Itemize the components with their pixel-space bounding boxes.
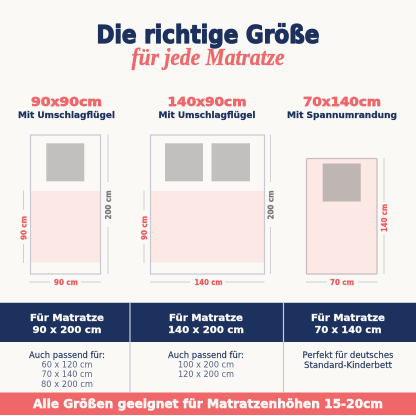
heading: 70x140cm: 70x140cm — [303, 94, 381, 109]
dimension 90 cm width — [30, 278, 101, 287]
column 2 header: 140 x 200 cm — [168, 325, 244, 336]
column 2 header: Für Matratze — [169, 313, 243, 324]
column 2 header — [168, 313, 244, 336]
title: Die richtige Größe — [96, 20, 320, 49]
dimension 90 cm height: 90 cm — [140, 216, 149, 240]
pillow right — [212, 143, 250, 181]
column 3 header: 70 x 140 cm — [314, 325, 382, 336]
column 1 body: 60 x 120 cm — [42, 360, 92, 370]
diagram: bed 90x200 — [20, 134, 113, 287]
dimension 200 cm: 200 cm — [266, 190, 276, 220]
pillow — [46, 143, 84, 181]
column 2 body: 120 x 200 cm — [178, 370, 234, 380]
column 1 header: Für Matratze — [30, 313, 104, 324]
heading: 70x140cm — [287, 94, 397, 121]
column 3 body: Perfekt für deutsches — [302, 351, 394, 361]
dimension 90 cm height — [140, 190, 149, 263]
column 2 body: 100 x 200 cm — [178, 360, 234, 370]
column 3 header: Für Matratze — [311, 313, 385, 324]
heading: 90x90cm: Mit Umschlagflügel — [18, 111, 115, 121]
heading: 140x90cm: 140x90cm — [168, 94, 246, 109]
table top rule — [0, 302, 416, 303]
dimension 90 cm height — [20, 190, 28, 263]
diagram: bed 140x200 — [140, 134, 276, 287]
dimension 70 cm: 70 cm — [330, 278, 354, 287]
footer banner — [0, 392, 416, 415]
dimension 140 cm: 140 cm — [380, 204, 389, 232]
footer banner: Alle Größen geeignet für Matratzenhöhen 15-20cm — [33, 397, 383, 411]
column 2 body — [168, 351, 244, 380]
column 1 header: 90 x 200 cm — [32, 325, 102, 336]
dimension 140 cm width — [150, 278, 264, 287]
heading: 90x90cm: 90x90cm — [31, 94, 102, 109]
table — [0, 302, 416, 392]
column 1 body: 80 x 200 cm — [41, 380, 93, 390]
pillow — [323, 164, 361, 202]
pillow left — [165, 143, 203, 181]
bed outline — [150, 135, 264, 274]
column 1 body: 70 x 140 cm — [42, 370, 92, 380]
pink flap — [30, 191, 100, 262]
column 1 body: Auch passend für: — [29, 351, 105, 361]
column 1 body — [29, 351, 105, 390]
column 2 body: Auch passend für: — [168, 351, 244, 361]
column dividers — [130, 303, 284, 392]
bed outline — [30, 135, 100, 274]
navy header band — [0, 303, 416, 342]
pink flap — [150, 191, 264, 262]
dimension 140 cm width: 140 cm — [194, 278, 222, 287]
dimension 200 cm — [266, 134, 276, 274]
title — [96, 20, 320, 71]
heading: 70x140cm: Mit Spannumrandung — [287, 111, 397, 121]
dimension 200 cm: 200 cm — [104, 190, 113, 220]
dimension 90 cm height: 90 cm — [20, 216, 28, 240]
heading: 90x90cm — [18, 94, 115, 121]
dimension 200 cm — [104, 134, 113, 274]
column 3 body — [302, 351, 394, 371]
dimension 90 cm width: 90 cm — [54, 278, 78, 287]
column 3 body: Standard-Kinderbett — [304, 361, 392, 371]
column 1 header — [30, 313, 104, 336]
heading: 140x90cm: Mit Umschlagflügel — [158, 111, 256, 121]
diagram: bed 70x140 — [306, 158, 389, 287]
pink sheet — [306, 158, 377, 274]
heading: 140x90cm — [158, 94, 256, 121]
subtitle: für jede Matratze — [132, 45, 285, 71]
column 3 header — [311, 313, 385, 336]
